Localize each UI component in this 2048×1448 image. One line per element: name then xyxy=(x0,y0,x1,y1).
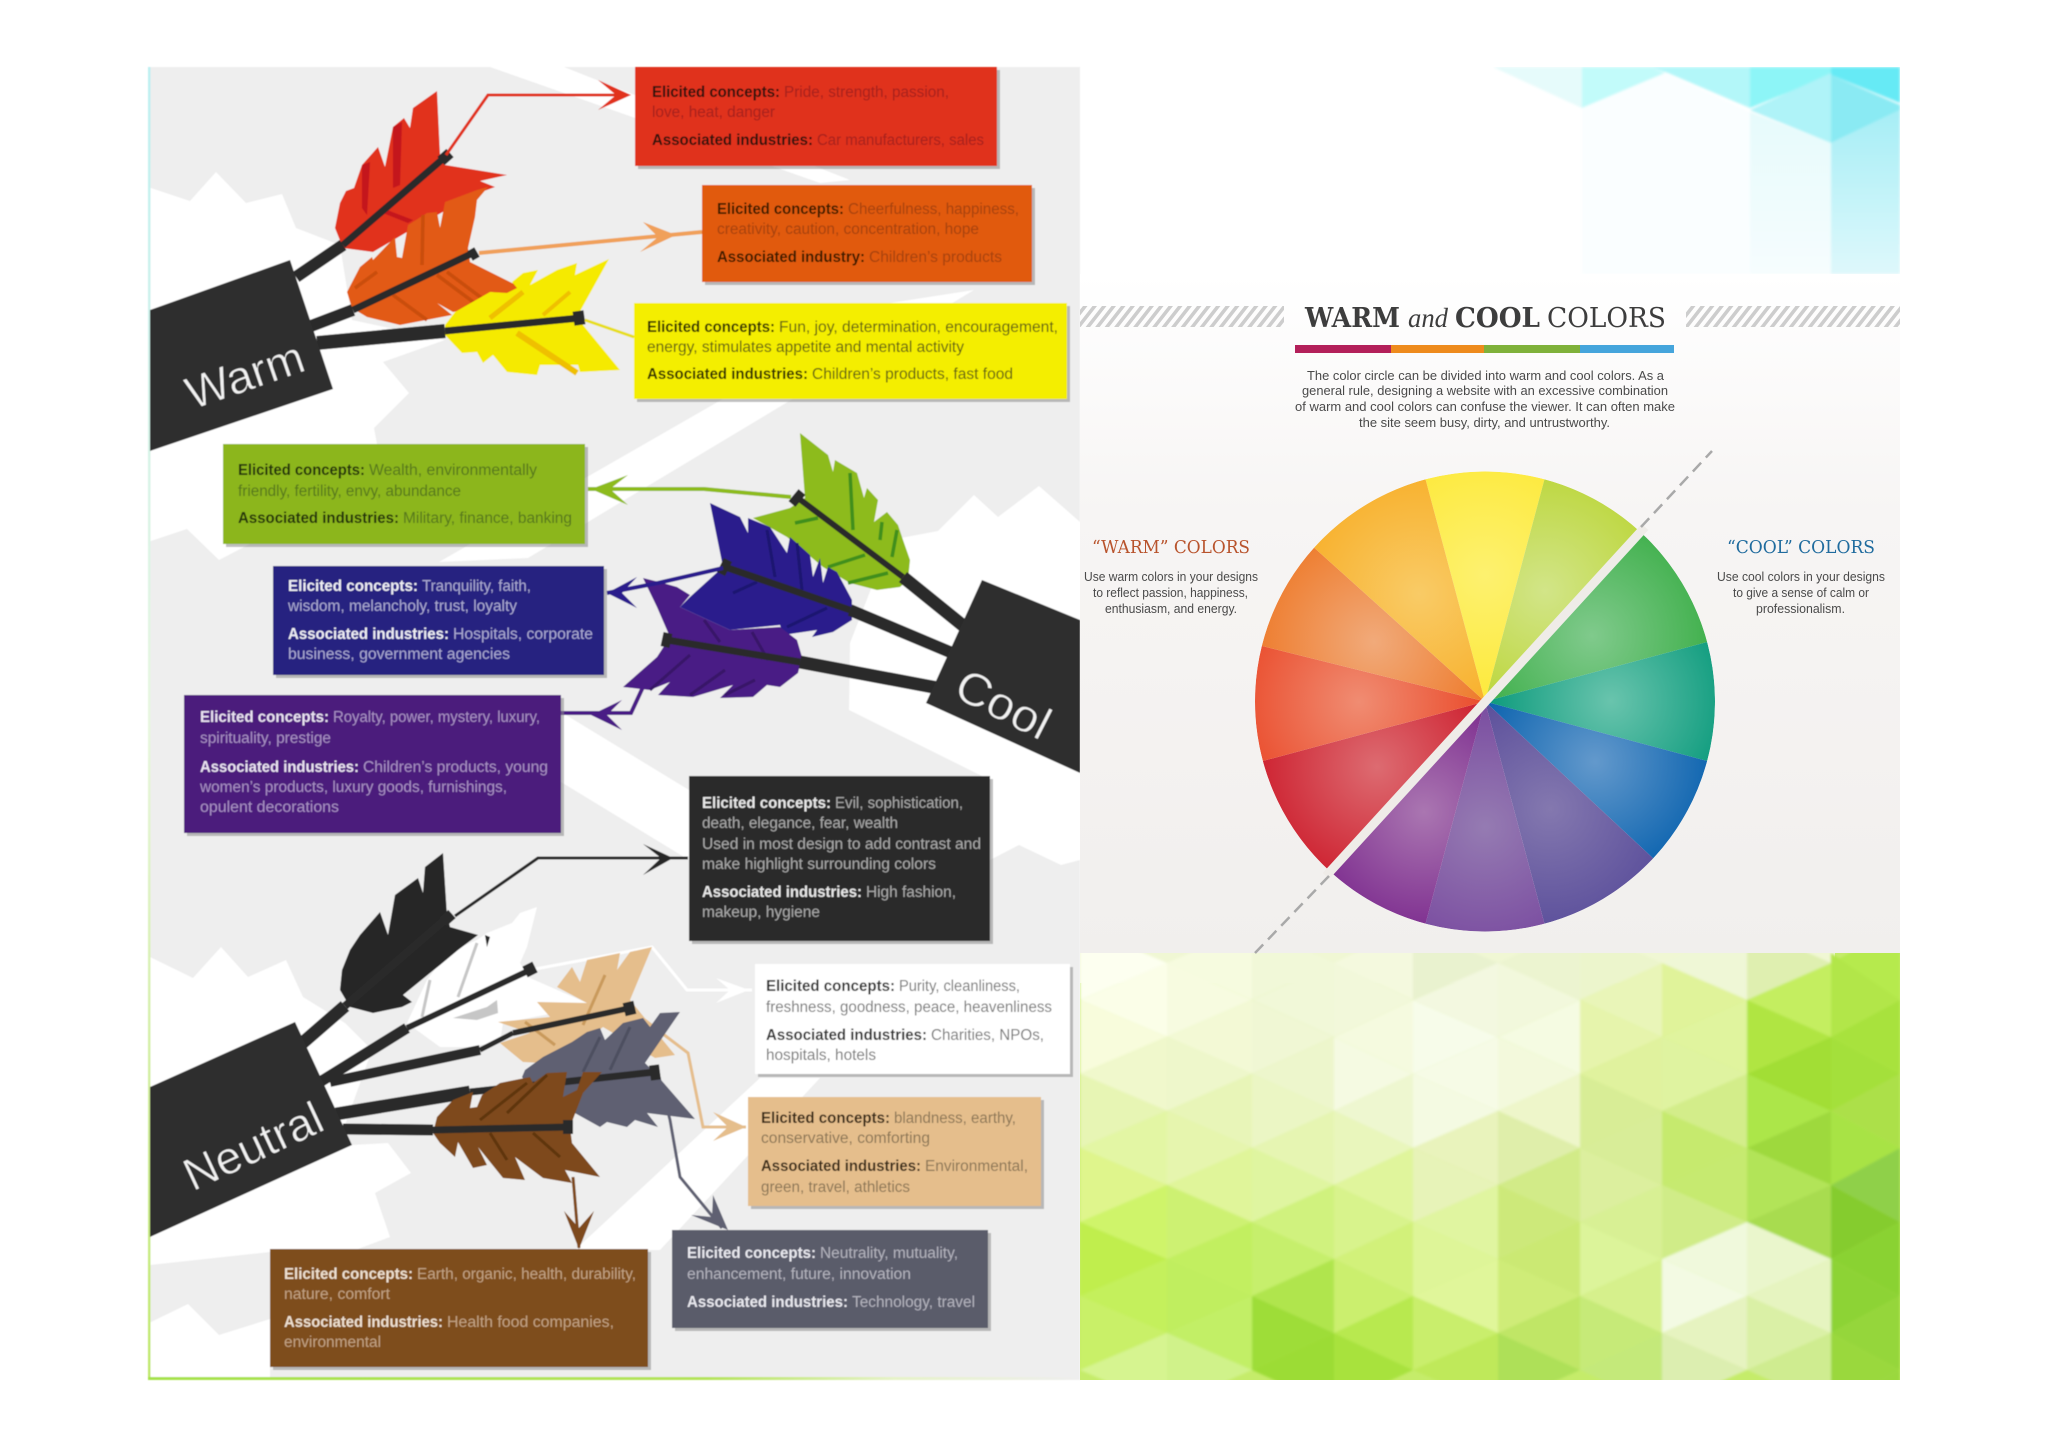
cool group xyxy=(561,433,1080,773)
tag: Neutral: Neutral xyxy=(175,1091,331,1201)
callout: yellow box xyxy=(634,303,1070,402)
callout: white box: Purity, cleanliness, xyxy=(899,978,1020,995)
tag: Neutral xyxy=(150,1022,352,1237)
callout: green box: Elicited concepts: xyxy=(238,462,365,479)
title: WARM xyxy=(1304,302,1400,334)
tag: Cool xyxy=(926,580,1080,773)
callout: purple box: Children’s products, young xyxy=(363,759,548,776)
hatched divider left xyxy=(1080,306,1284,327)
shaft: green xyxy=(792,492,966,628)
callout: tan box: green, travel, athletics xyxy=(761,1179,910,1196)
intro paragraph: the site seem busy, dirty, and untrustworthy. xyxy=(1359,416,1610,430)
shaft: navy xyxy=(721,560,957,655)
callout: brown box xyxy=(270,1249,651,1370)
title: COOL xyxy=(1455,302,1540,334)
callout: red box: Elicited concepts: xyxy=(652,84,780,101)
callout: black box: Used in most design to add contrast and xyxy=(702,836,981,853)
callout: brown box: Health food companies, xyxy=(447,1314,614,1331)
feather: black xyxy=(340,853,490,1013)
callout: tan box: Associated industries: xyxy=(761,1158,921,1175)
infographic canvas xyxy=(147,66,1900,1381)
callout: orange box: Associated industry: xyxy=(717,249,865,266)
intro paragraph: of warm and cool colors can confuse the viewer. It can often make xyxy=(1295,400,1675,414)
shaft: black xyxy=(299,914,452,1046)
callout: navy box: Hospitals, corporate xyxy=(453,626,593,643)
dashed axis upper xyxy=(1641,451,1712,527)
shaft: white xyxy=(320,967,535,1082)
text: cool description xyxy=(1717,570,1885,616)
callout: black box: High fashion, xyxy=(866,884,956,901)
arrow: white to box xyxy=(530,947,752,1003)
callout: red box: Car manufacturers, sales xyxy=(817,132,984,149)
feather: purple xyxy=(623,578,802,698)
feather: brown xyxy=(433,1072,602,1183)
callout: yellow box: Elicited concepts: xyxy=(647,319,775,336)
arrow: purple to box xyxy=(561,687,643,730)
callout: yellow box: Fun, joy, determination, encouragement, xyxy=(779,319,1058,336)
callout: black box xyxy=(689,776,993,944)
callout: brown box: environmental xyxy=(284,1334,381,1351)
text: cool description: professionalism. xyxy=(1756,602,1845,616)
panel: cyan mosaic corner xyxy=(1493,67,1900,274)
arrow: yellow to box xyxy=(585,320,634,337)
text: warm description: to reflect passion, happiness, xyxy=(1093,586,1248,600)
text: cool description: to give a sense of calm or xyxy=(1733,586,1869,600)
shaft: orange xyxy=(311,252,477,326)
callout: tan box xyxy=(748,1097,1044,1209)
callout: navy box xyxy=(273,566,607,678)
callout: brown box: nature, comfort xyxy=(284,1286,391,1303)
tag: Cool: Cool xyxy=(947,658,1060,750)
callout: purple box: Associated industries: xyxy=(200,759,359,776)
callout: red box xyxy=(635,67,1000,169)
title: and xyxy=(1408,303,1448,333)
heading: warm colors: “WARM” COLORS xyxy=(1092,537,1250,558)
callout: navy box: business, government agencies xyxy=(288,646,510,663)
title xyxy=(1304,302,1666,334)
callout: brown box: Elicited concepts: xyxy=(284,1266,413,1283)
callout: grey box: Neutrality, mutuality, xyxy=(820,1245,958,1262)
callout: green box: Military, finance, banking xyxy=(403,510,572,527)
arrow: grey to box xyxy=(658,1073,728,1230)
text: warm description: enthusiasm, and energy. xyxy=(1105,602,1237,616)
arrow: red to box xyxy=(446,80,631,155)
callout: black box: Evil, sophistication, xyxy=(835,795,963,812)
title: COLORS xyxy=(1547,302,1666,334)
arrow: black to box xyxy=(455,844,688,916)
callout: black box: make highlight surrounding colors xyxy=(702,856,936,873)
intro paragraph: general rule, designing a website with an excessive combination xyxy=(1302,384,1668,398)
callout: grey box: enhancement, future, innovation xyxy=(687,1266,911,1283)
callout: navy box: wisdom, melancholy, trust, loyalty xyxy=(287,598,517,615)
callout: green box: Wealth, environmentally xyxy=(369,462,537,479)
callout: orange box xyxy=(702,185,1035,285)
wheel divider xyxy=(1326,527,1645,876)
shaft: grey xyxy=(336,1065,656,1114)
intro paragraph: The color circle can be divided into warm and cool colors. As a xyxy=(1307,369,1664,383)
arrow: green to box xyxy=(588,475,791,505)
callout: black box: Associated industries: xyxy=(702,884,862,901)
panel: green mosaic background xyxy=(1080,953,1900,1380)
feather: grey xyxy=(522,1012,695,1127)
callout: yellow box: energy, stimulates appetite and mental activity xyxy=(647,339,964,356)
callout: purple box: spirituality, prestige xyxy=(200,730,331,747)
warm group xyxy=(150,80,702,451)
rainbow title bar xyxy=(1295,345,1674,353)
callout: tan box: conservative, comforting xyxy=(761,1130,930,1147)
callout: navy box: Tranquility, faith, xyxy=(422,578,531,595)
callout: red box: Pride, strength, passion, xyxy=(784,84,949,101)
shaft: tan xyxy=(330,1002,631,1082)
arrow: tan to box xyxy=(642,1018,746,1141)
callout: grey box xyxy=(672,1230,991,1331)
callout: red box: love, heat, danger xyxy=(652,104,775,121)
callout: navy box: Elicited concepts: xyxy=(288,578,418,595)
callout: red box: Associated industries: xyxy=(652,132,813,149)
panel: color theory panel background xyxy=(1080,274,1900,954)
callout: grey box: Elicited concepts: xyxy=(687,1245,816,1262)
callout: white box: hospitals, hotels xyxy=(766,1047,876,1064)
shaft: red xyxy=(296,153,450,277)
feather: green xyxy=(753,433,910,590)
feather: yellow xyxy=(445,259,620,375)
callout: grey box: Technology, travel xyxy=(852,1294,975,1311)
shaft: purple xyxy=(665,633,938,688)
callout: purple box xyxy=(184,695,564,836)
text: warm description xyxy=(1084,570,1258,616)
feather: tan xyxy=(498,947,675,1063)
callout: black box: makeup, hygiene xyxy=(702,904,820,921)
callout: yellow box: Children’s products, fast food xyxy=(812,366,1013,383)
callout: white box: Elicited concepts: xyxy=(766,978,895,995)
tag: Warm xyxy=(150,260,333,451)
callout: white box: Associated industries: xyxy=(766,1027,927,1044)
callout: purple box: opulent decorations xyxy=(200,799,339,816)
heading: cool colors: “COOL” COLORS xyxy=(1727,537,1875,558)
feather: orange xyxy=(347,187,527,325)
shaft: yellow xyxy=(317,311,580,343)
neutral group xyxy=(150,844,752,1249)
panel: left arrows panel xyxy=(148,67,1080,1380)
callout: green box: friendly, fertility, envy, abundance xyxy=(238,483,461,500)
callout: purple box: Elicited concepts: xyxy=(200,709,329,726)
callout: black box: Elicited concepts: xyxy=(702,795,831,812)
callout: green box xyxy=(223,444,588,547)
arrow: navy to box xyxy=(607,568,723,608)
callout: black box: death, elegance, fear, wealth xyxy=(702,815,898,832)
intro paragraph xyxy=(1295,369,1675,430)
callout: green box: Associated industries: xyxy=(238,510,399,527)
callout: orange box: Children’s products xyxy=(869,249,1002,266)
callout: brown box: Associated industries: xyxy=(284,1314,443,1331)
hatched divider right xyxy=(1686,306,1900,327)
callout: tan box: Environmental, xyxy=(925,1158,1028,1175)
callout: navy box: Associated industries: xyxy=(288,626,449,643)
callout: purple box: Royalty, power, mystery, luxury, xyxy=(333,709,540,726)
callout: tan box: Elicited concepts: xyxy=(761,1110,890,1127)
text: cool description: Use cool colors in your designs xyxy=(1717,570,1885,584)
feather: white xyxy=(407,907,587,1047)
text: warm description: Use warm colors in your designs xyxy=(1084,570,1258,584)
callout: orange box: creativity, caution, concentration, hope xyxy=(717,221,979,238)
dashed axis lower xyxy=(1255,876,1329,953)
callout: white box: Charities, NPOs, xyxy=(931,1027,1044,1044)
tag: Warm: Warm xyxy=(179,330,311,419)
callout: white box xyxy=(755,964,1073,1077)
callout: brown box: Earth, organic, health, durability, xyxy=(417,1266,636,1283)
chart: color wheel xyxy=(1255,471,1715,932)
callout: orange box: Elicited concepts: xyxy=(717,201,844,218)
callout: yellow box: Associated industries: xyxy=(647,366,808,383)
arrow: orange to box xyxy=(479,222,702,253)
callout: tan box: blandness, earthy, xyxy=(894,1110,1016,1127)
callout: orange box: Cheerfulness, happiness, xyxy=(848,201,1019,218)
feather: red xyxy=(335,91,507,252)
shaft: brown xyxy=(343,1120,568,1134)
callout: purple box: women’s products, luxury goods, furnishings, xyxy=(199,779,507,796)
callout: white box: freshness, goodness, peace, heavenliness xyxy=(766,999,1052,1016)
feather: navy xyxy=(680,503,852,637)
arrow: brown to box xyxy=(564,1177,594,1249)
callout: grey box: Associated industries: xyxy=(687,1294,848,1311)
